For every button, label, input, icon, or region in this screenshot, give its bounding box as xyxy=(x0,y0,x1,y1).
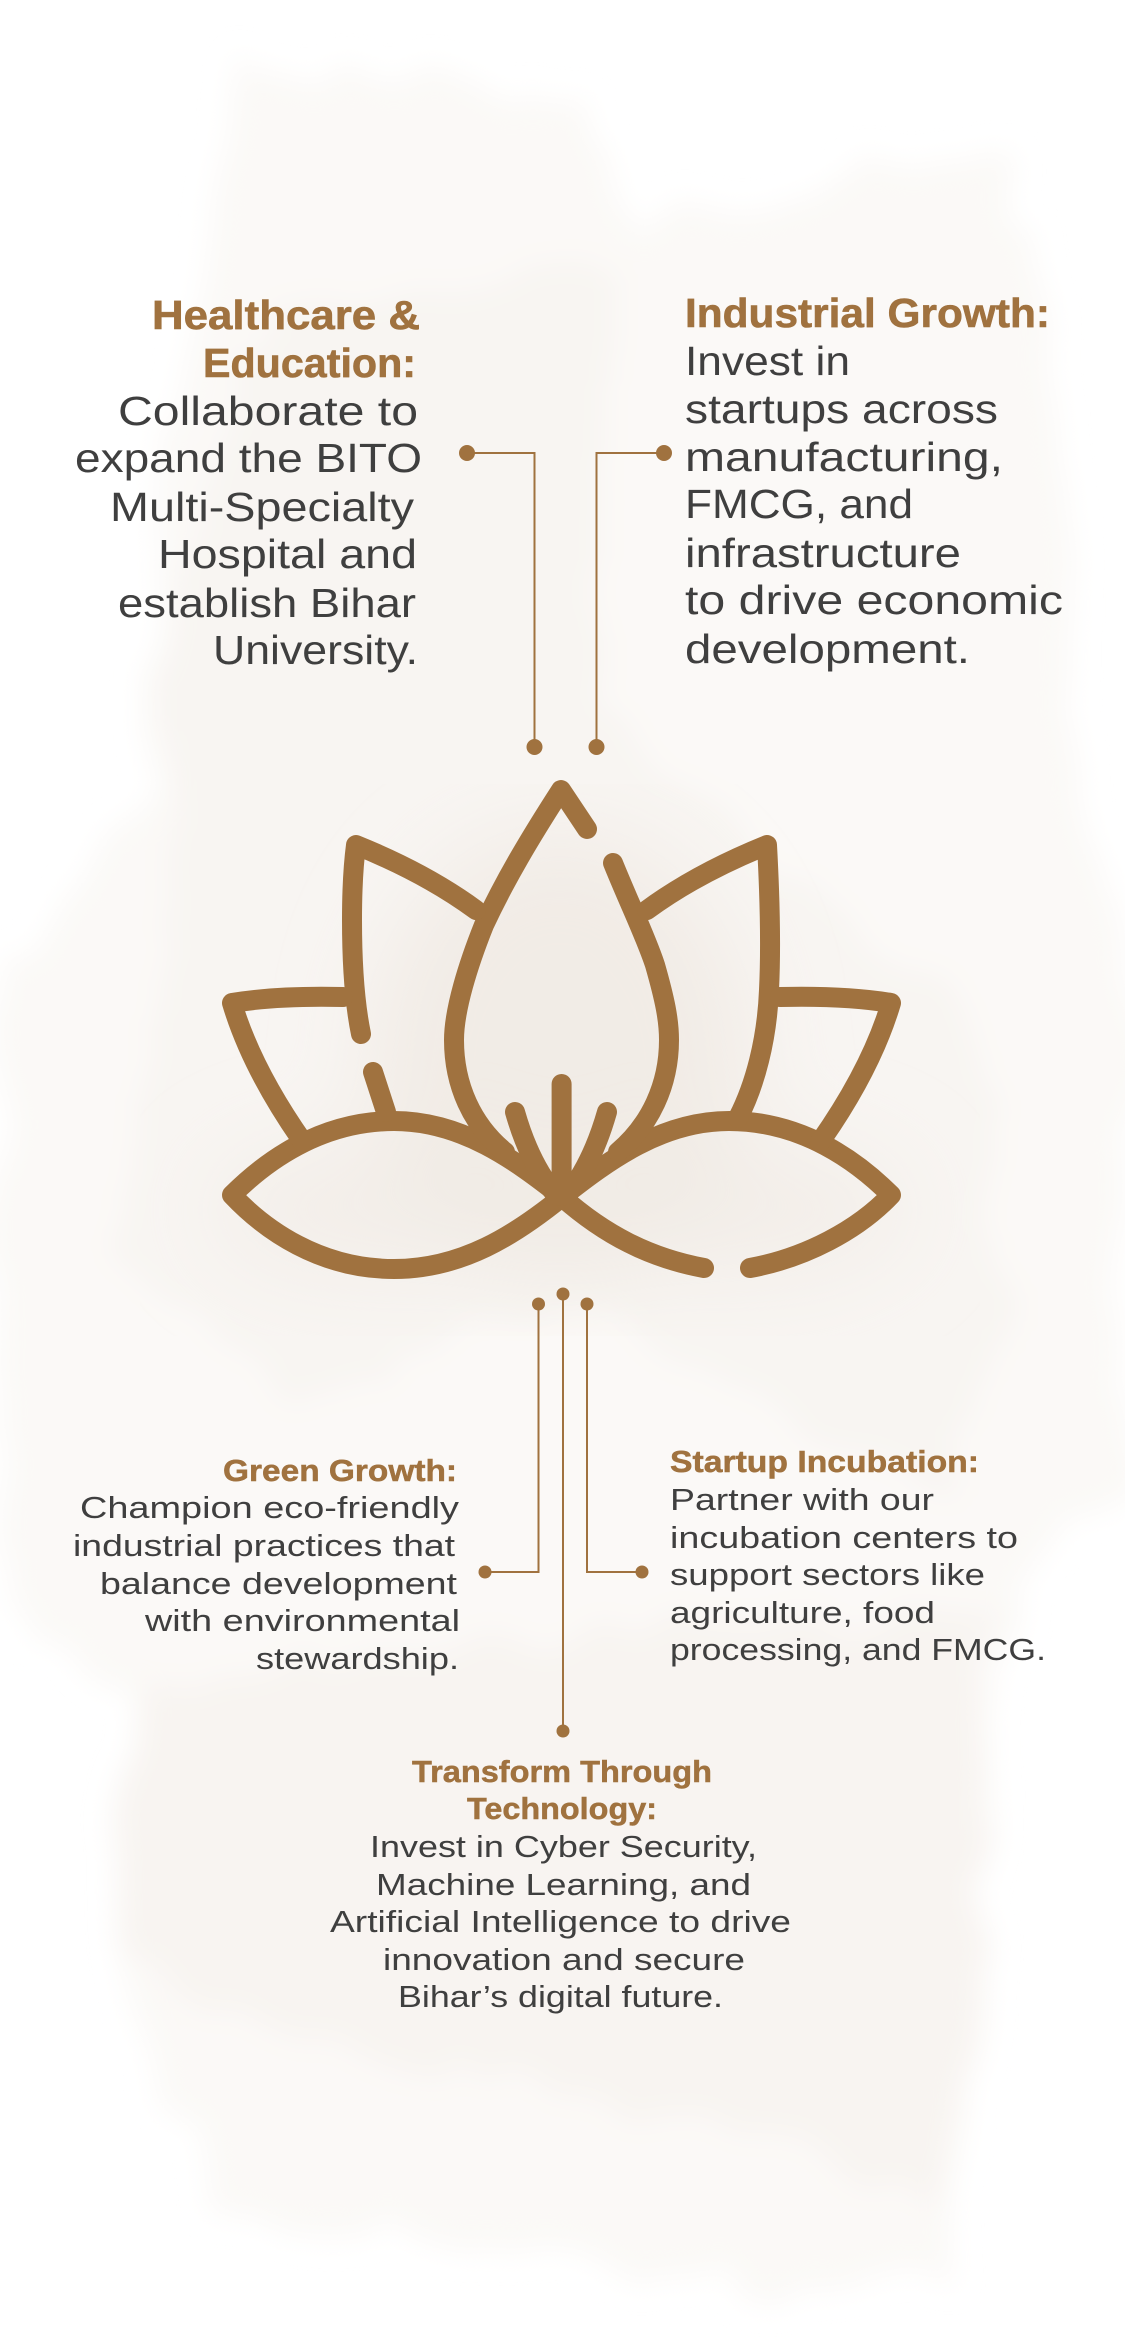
lotus: left middle petal xyxy=(352,845,476,1112)
text block: transform through technology: innovation and secure xyxy=(383,1942,745,1977)
text block: startup incubation: processing, and FMCG. xyxy=(670,1632,1046,1667)
text block: industrial growth xyxy=(685,290,1063,672)
text block: industrial growth: to drive economic xyxy=(685,577,1063,623)
text block: green growth: industrial practices that xyxy=(73,1528,455,1563)
text block: startup incubation: Partner with our xyxy=(670,1482,934,1517)
text block: healthcare and education: Education: xyxy=(203,340,416,386)
lotus: left small petal xyxy=(232,997,343,1142)
text block: transform through technology: Invest in Cyber Security, xyxy=(370,1829,757,1864)
text block: transform through technology: Transform Through xyxy=(412,1754,712,1789)
text block: industrial growth: FMCG, and xyxy=(685,481,913,527)
connector: green growth xyxy=(478,1298,545,1578)
icon: lotus xyxy=(232,790,891,1269)
text block: industrial growth: infrastructure xyxy=(685,530,961,576)
text block: healthcare and education: establish Bihar xyxy=(118,580,416,626)
text block: startup incubation: Startup Incubation: xyxy=(670,1444,979,1479)
connector: startup xyxy=(580,1298,648,1578)
text block: transform through technology: Bihar’s digital future. xyxy=(398,1979,723,2014)
text block: healthcare and education xyxy=(75,292,422,673)
text block: healthcare and education: expand the BITO xyxy=(75,435,422,481)
text block: healthcare and education: Multi-Specialty xyxy=(110,484,415,530)
text block: industrial growth: Industrial Growth: xyxy=(685,290,1050,336)
text block: transform through technology: Artificial Intelligence to drive xyxy=(330,1904,791,1939)
text block: startup incubation: incubation centers to xyxy=(670,1520,1018,1555)
lotus: right small petal xyxy=(780,997,891,1142)
text block: transform through technology: Technology: xyxy=(467,1791,657,1826)
text block: industrial growth: development. xyxy=(685,626,970,672)
text block: healthcare and education: University. xyxy=(213,627,418,673)
lotus: bottom left leaf xyxy=(232,1121,562,1269)
text block: industrial growth: Invest in xyxy=(685,338,850,384)
text block: green growth: with environmental xyxy=(144,1603,460,1638)
text block: green growth: stewardship. xyxy=(256,1641,459,1676)
text block: healthcare and education: Healthcare & xyxy=(152,292,420,338)
text block: green growth xyxy=(73,1453,460,1676)
connector: technology xyxy=(556,1288,570,1738)
connector: healthcare xyxy=(459,445,542,755)
text block: startup incubation: agriculture, food xyxy=(670,1595,935,1630)
connector: industrial xyxy=(588,445,672,755)
text block: startup incubation: support sectors like xyxy=(670,1557,985,1592)
lotus: bottom right leaf xyxy=(562,1121,891,1268)
lotus: right middle petal xyxy=(647,845,770,1118)
text block: healthcare and education: Hospital and xyxy=(158,531,417,577)
text block: startup incubation xyxy=(670,1444,1046,1667)
text block: industrial growth: manufacturing, xyxy=(685,434,1003,480)
text block: transform through technology: Machine Learning, and xyxy=(376,1867,751,1902)
text block: green growth: Champion eco-friendly xyxy=(80,1490,460,1525)
text block: industrial growth: startups across xyxy=(685,386,998,432)
text block: healthcare and education: Collaborate to xyxy=(118,388,418,434)
text block: transform through technology xyxy=(330,1754,791,2014)
lotus: centre stems xyxy=(515,1084,607,1196)
text block: green growth: Green Growth: xyxy=(223,1453,457,1488)
text block: green growth: balance development xyxy=(100,1566,457,1601)
lotus: centre petal xyxy=(454,790,669,1152)
